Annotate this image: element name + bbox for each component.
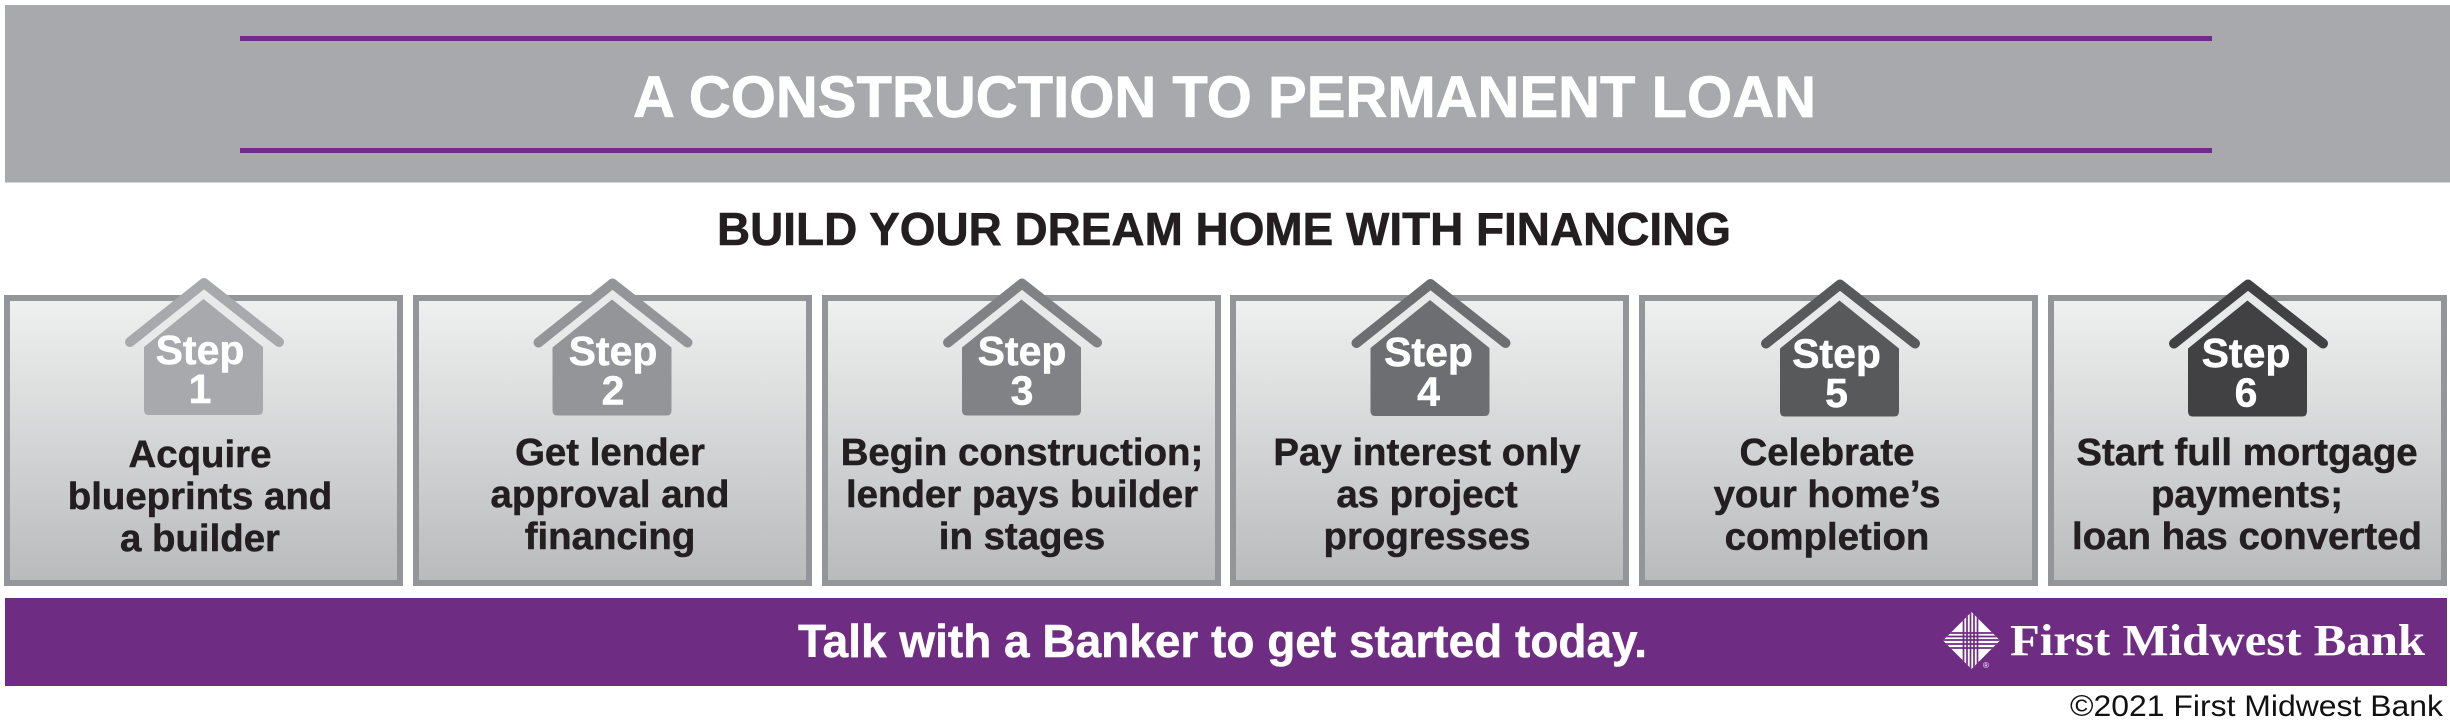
panel: step 6 — [2051, 284, 2444, 583]
step 6 description: loan has converted — [2072, 515, 2422, 558]
icon: house step 1 — [130, 283, 279, 415]
step 3 description: lender pays builder — [846, 473, 1198, 516]
icon: house step 4: Step — [1384, 329, 1473, 375]
icon: bank logo diamond: ® — [1983, 661, 1989, 670]
icon: house step 6: 6 — [2235, 370, 2257, 416]
icon: house step 6 — [2174, 284, 2323, 416]
step 3 description: Begin construction; — [841, 431, 1203, 474]
icon: house step 4: 4 — [1417, 368, 1440, 414]
step 5 description: your home’s — [1714, 473, 1940, 516]
icon: house step 5 — [1766, 284, 1915, 416]
step 1 description: blueprints and — [68, 475, 332, 518]
icon: house step 3: Step — [978, 328, 1066, 374]
step 5 description: Celebrate — [1740, 431, 1914, 474]
panel: step 4 — [1233, 284, 1626, 583]
icon: house step 3: 3 — [1011, 368, 1033, 414]
subtitle: BUILD YOUR DREAM HOME WITH FINANCING — [717, 203, 1731, 255]
step 2 description: approval and — [491, 473, 729, 516]
icon: house step 2: 2 — [602, 368, 624, 414]
icon: house step 3 — [948, 284, 1097, 416]
step 6 description: payments; — [2151, 473, 2343, 516]
title: A CONSTRUCTION TO PERMANENT LOAN — [633, 65, 1816, 130]
icon: house step 2: Step — [569, 328, 657, 374]
step 6 description — [2072, 431, 2422, 558]
icon: house step 5: Step — [1792, 330, 1881, 376]
step 5 description: completion — [1725, 516, 1929, 558]
step 6 description: Start full mortgage — [2076, 431, 2418, 474]
step 2 description: Get lender — [515, 431, 705, 474]
icon: house step 1: Step — [156, 327, 244, 373]
icon: house step 2 — [538, 284, 688, 416]
step 2 description — [491, 431, 729, 558]
icon: house step 5: 5 — [1825, 370, 1848, 416]
copyright: ©2021 First Midwest Bank — [2070, 690, 2444, 723]
step 1 description — [68, 433, 332, 560]
icon: bank logo diamond — [1943, 612, 2000, 669]
icon: house step 1: 1 — [189, 366, 211, 412]
bank name: First Midwest Bank — [2010, 616, 2426, 665]
step 4 description: progresses — [1324, 515, 1530, 558]
step 5 description — [1714, 431, 1940, 558]
icon: house step 4 — [1356, 284, 1506, 416]
step 4 description: Pay interest only — [1273, 431, 1581, 474]
step 4 description: as project — [1336, 473, 1518, 516]
step 4 description — [1273, 431, 1581, 558]
step 1 description: Acquire — [129, 433, 271, 476]
panel: step 2 — [416, 284, 809, 583]
icon: house step 6: Step — [2202, 330, 2290, 376]
call to action text: Talk with a Banker to get started today. — [798, 615, 1647, 667]
header banner — [5, 5, 2450, 182]
step 2 description: financing — [525, 515, 695, 558]
step 3 description: in stages — [939, 515, 1105, 558]
call to action bar — [5, 598, 2447, 686]
panel: step 5 — [1642, 284, 2035, 583]
panel: step 3 — [825, 284, 1218, 583]
step 3 description — [841, 431, 1203, 558]
step 1 description: a builder — [120, 517, 280, 560]
panel: step 1 — [7, 283, 400, 583]
